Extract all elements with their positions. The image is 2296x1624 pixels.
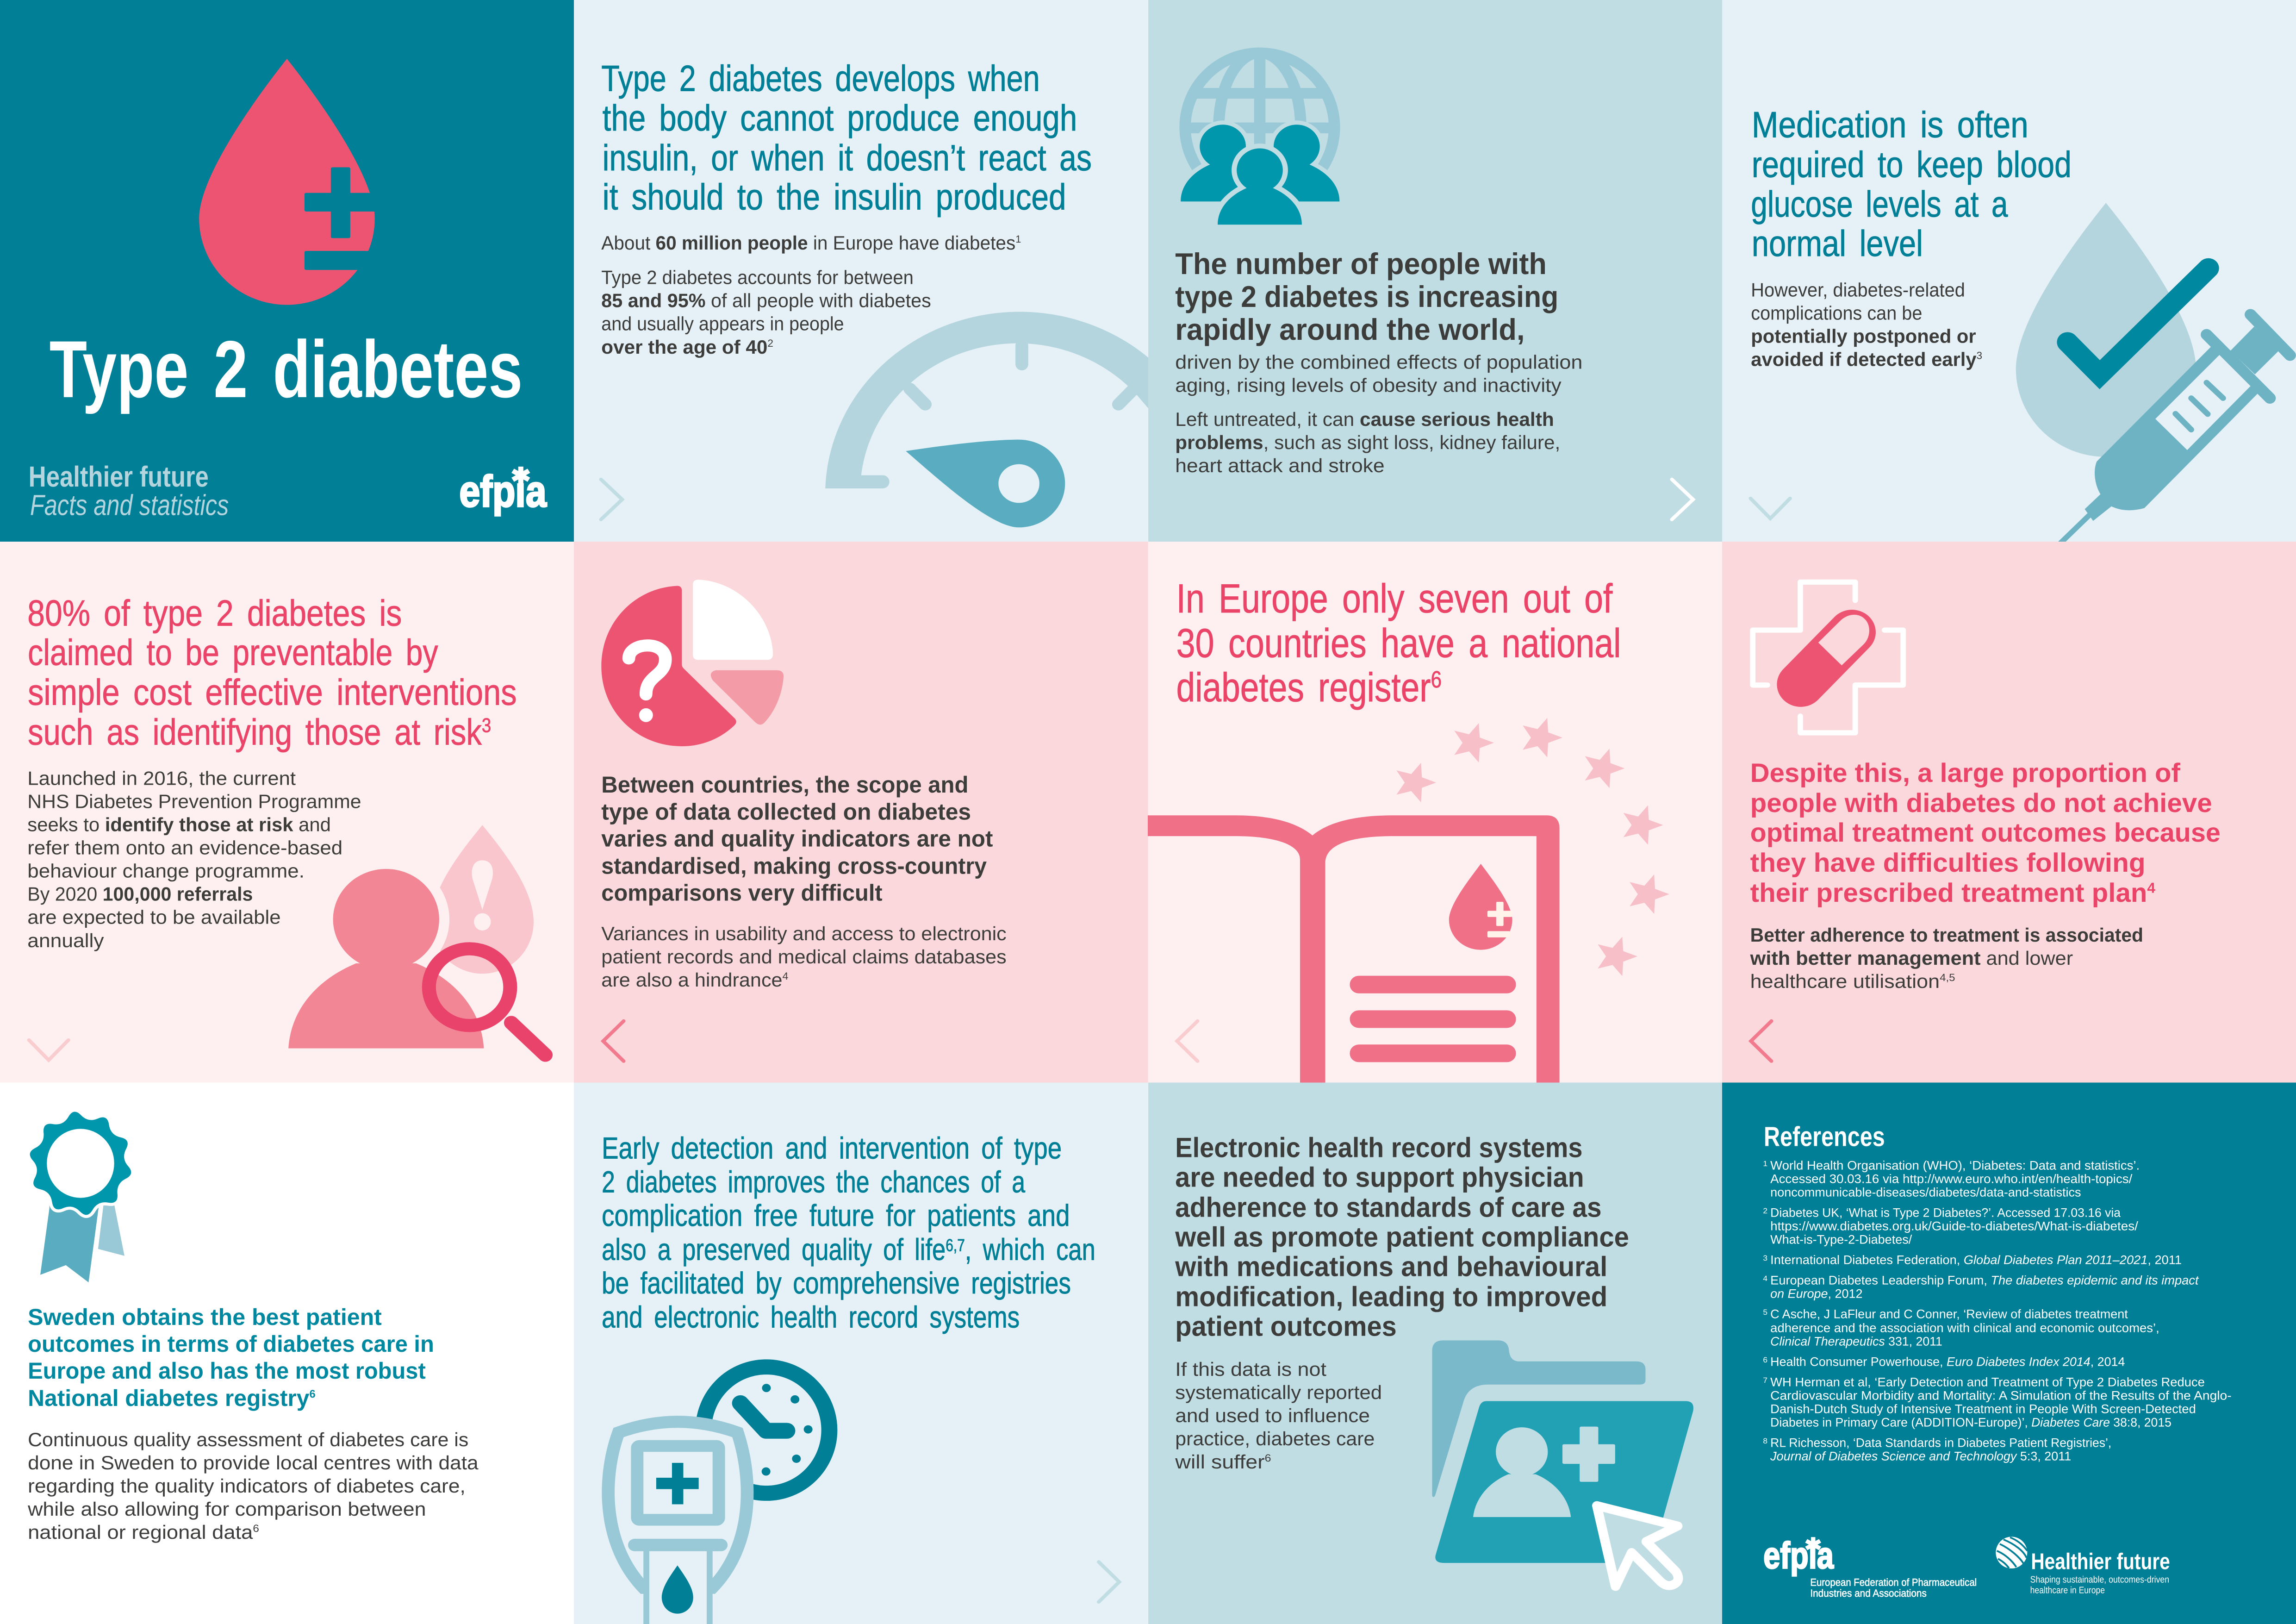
heading: be facilitated by comprehensive registries [602, 1266, 1071, 1300]
heading: complication free future for patients and [602, 1198, 1070, 1232]
heading [1750, 758, 2221, 908]
heading: National diabetes registry [28, 1385, 328, 1411]
panel: treatment adherence [1722, 542, 2296, 1084]
heading: 2 diabetes improves the chances of a [602, 1165, 1025, 1199]
heading: , which can [965, 1232, 1095, 1267]
reference list: What-is-Type-2-Diabetes/ [1770, 1232, 1912, 1247]
body text: driven by the combined effects of population [1175, 351, 1582, 373]
panel: references [1722, 1083, 2296, 1624]
icon: open book register [1148, 815, 1560, 1084]
reference list: World Health Organisation (WHO), ‘Diabetes: Data and statistics’. [1770, 1158, 2140, 1172]
heading: comparisons very difficult [601, 880, 883, 906]
reference list: 5 [1763, 1308, 1767, 1317]
heading: insulin, or when it doesn’t react as [603, 137, 1092, 178]
body text: problems, such as sight loss, kidney failure, [1175, 431, 1560, 453]
heading: Medication is often [1752, 104, 2028, 145]
panel: medication [1722, 0, 2296, 543]
reference list: 7 [1763, 1376, 1767, 1385]
body text [1175, 1358, 1382, 1473]
body text [1175, 351, 1582, 476]
body text: done in Sweden to provide local centres with data [28, 1452, 479, 1474]
heading: their prescribed treatment plan [1750, 878, 2165, 908]
panel: data variation [574, 542, 1148, 1084]
heading: In Europe only seven out of [1176, 576, 1612, 621]
panel: increasing worldwide [1148, 0, 1723, 542]
statistics text: 2 [767, 337, 773, 349]
arrow: right [601, 480, 622, 519]
heading: rapidly around the world, [1175, 313, 1525, 346]
icon: award rosette [30, 1112, 131, 1282]
reference list: 8 [1763, 1437, 1767, 1445]
panel: what is type 2 diabetes [574, 0, 1149, 542]
heading: Electronic health record systems [1175, 1132, 1582, 1163]
arrow: right [1672, 480, 1693, 519]
panel: early detection [574, 1083, 1148, 1624]
heading: it should to the insulin produced [603, 177, 1066, 218]
efpia logo: European Federation of Pharmaceutical [1810, 1577, 1977, 1588]
reference list: Accessed 30.03.16 via http://www.euro.who.int/en/health-topics/ [1770, 1172, 2132, 1186]
reference list: Danish-Dutch Study of Intensive Treatment in People With Screen-Detected [1770, 1402, 2196, 1416]
heading: Type 2 diabetes develops when [601, 58, 1040, 99]
heading: references: References [1764, 1121, 1885, 1152]
reference list: noncommunicable-diseases/diabetes/data-and-statistics [1770, 1185, 2081, 1199]
panel: title [0, 0, 574, 542]
body text: 4,5 [1940, 972, 1955, 983]
body text: national or regional data [28, 1521, 248, 1543]
icon: person, drop and magnifier [288, 825, 545, 1055]
heading: Europe and also has the most robust [28, 1358, 426, 1384]
heading: glucose levels at a [1751, 184, 2008, 225]
heading: also a preserved quality of life [602, 1232, 1057, 1267]
body text: practice, diabetes care [1175, 1428, 1375, 1449]
heading: The number of people with [1175, 247, 1547, 281]
heading [1175, 247, 1558, 346]
body text: Launched in 2016, the current [27, 768, 296, 789]
heading [1751, 104, 2072, 264]
body text: complications can be [1751, 302, 1922, 324]
body text [27, 1429, 479, 1543]
subtitle [30, 466, 229, 516]
heading: claimed to be preventable by [28, 632, 438, 673]
body text: while also allowing for comparison between [27, 1498, 426, 1520]
heading: Between countries, the scope and [601, 772, 968, 798]
heading: type 2 diabetes is increasing [1175, 280, 1558, 313]
reference list: 4 [1763, 1274, 1767, 1283]
reference list: Journal of Diabetes Science and Technology 5:3, 2011 [1770, 1449, 2071, 1463]
heading: Early detection and intervention of type [602, 1131, 1062, 1165]
heading: 30 countries have a national [1176, 620, 1621, 666]
heading [602, 1131, 1095, 1334]
icon: stars [1389, 712, 1674, 979]
statistics text: and usually appears in people [601, 313, 844, 335]
arrow: down [1750, 499, 1790, 518]
reference list: https://www.diabetes.org.uk/Guide-to-diabetes/What-is-diabetes/ [1770, 1219, 2138, 1233]
body text: refer them onto an evidence-based [27, 837, 342, 859]
body text: healthcare utilisation [1750, 970, 1937, 992]
body text [1750, 924, 2143, 992]
heading: well as promote patient compliance [1175, 1222, 1629, 1253]
heading: modification, leading to improved [1175, 1281, 1607, 1312]
icon: globe with people [1181, 52, 1339, 225]
heading: 4 [2147, 880, 2156, 896]
heading: 80% of type 2 diabetes is [27, 593, 402, 634]
subtitle: Facts and statistics [30, 489, 229, 521]
statistics text: 85 and 95% of all people with diabetes [601, 290, 931, 312]
body text: systematically reported [1175, 1381, 1382, 1403]
heading: patient outcomes [1175, 1311, 1397, 1342]
body text: Left untreated, it can cause serious health [1175, 408, 1554, 430]
body text: are also a hindrance [601, 969, 787, 991]
heading [1175, 1132, 1629, 1342]
heading: Despite this, a large proportion of [1750, 758, 2180, 788]
body text: Continuous quality assessment of diabetes care is [28, 1429, 468, 1450]
heading: 6 [1431, 667, 1442, 693]
reference list: 3 [1763, 1254, 1767, 1262]
icon: blood drop with plus and minus [199, 59, 378, 305]
icon: clock [703, 1367, 829, 1493]
statistics text: 1 [1015, 234, 1021, 245]
heading [601, 58, 1092, 218]
reference list: 6 [1763, 1355, 1767, 1364]
heading: standardised, making cross-country [601, 853, 987, 879]
body text: potentially postponed or [1751, 325, 1976, 347]
reference list: Cardiovascular Morbidity and Mortality: A Simulation of the Results of the Anglo- [1770, 1388, 2232, 1402]
heading: 6,7 [946, 1236, 965, 1255]
healthier future logo: Shaping sustainable, outcomes-driven [2030, 1574, 2169, 1585]
heading [601, 772, 993, 906]
reference list: 2 [1763, 1206, 1767, 1215]
body text: behaviour change programme. [27, 860, 305, 882]
healthier future logo: healthcare in Europe [2030, 1585, 2105, 1595]
body text: 6 [1265, 1453, 1271, 1464]
body text: and used to influence [1175, 1405, 1370, 1426]
statistics text [601, 232, 1021, 358]
heading: Sweden obtains the best patient [28, 1304, 382, 1330]
body text: 6 [253, 1523, 259, 1534]
heading: they have difficulties following [1750, 848, 2146, 878]
icon: pie chart with question mark [601, 580, 784, 746]
panel: national registers [1148, 542, 1723, 1084]
body text: avoided if detected early [1751, 349, 1977, 370]
heading: are needed to support physician [1175, 1162, 1584, 1193]
icon: drop, check and syringe [2016, 203, 2290, 543]
statistics text: over the age of 40 [601, 336, 767, 358]
body text: By 2020 100,000 referrals [27, 883, 253, 905]
body text: will suffer [1175, 1451, 1260, 1473]
reference list: International Diabetes Federation, Global Diabetes Plan 2011–2021, 2011 [1770, 1253, 2182, 1267]
subtitle: Healthier future [29, 460, 209, 493]
heading: and electronic health record systems [602, 1300, 1020, 1334]
reference list: Diabetes UK, ‘What is Type 2 Diabetes?’. Accessed 17.03.16 via [1770, 1206, 2121, 1219]
body text: If this data is not [1175, 1358, 1326, 1380]
heading [1176, 576, 1621, 710]
body text: with better management and lower [1750, 947, 2073, 969]
body text: seeks to identify those at risk and [27, 814, 331, 836]
reference list: C Asche, J LaFleur and C Conner, ‘Review of diabetes treatment [1770, 1307, 2128, 1321]
heading: adherence to standards of care as [1175, 1192, 1602, 1223]
reference list: WH Herman et al, ‘Early Detection and Treatment of Type 2 Diabetes Reduce [1770, 1375, 2205, 1389]
body text: annually [27, 930, 104, 951]
body text [27, 768, 361, 951]
heading: diabetes register [1176, 665, 1501, 710]
body text: heart attack and stroke [1175, 455, 1385, 476]
arrow: left [1177, 1021, 1198, 1061]
reference list: Clinical Therapeutics 331, 2011 [1770, 1334, 1942, 1348]
body text: Variances in usability and access to electronic [601, 923, 1007, 944]
body text: However, diabetes-related [1751, 279, 1965, 301]
heading: simple cost effective interventions [28, 672, 517, 713]
heading: outcomes in terms of diabetes care in [28, 1331, 434, 1357]
efpia logo: efpia [459, 467, 547, 516]
body text: 4 [783, 971, 788, 982]
heading: 3 [482, 714, 491, 737]
heading [27, 593, 517, 752]
heading: normal level [1752, 223, 1923, 264]
reference list: European Diabetes Leadership Forum, The diabetes epidemic and its impact [1770, 1273, 2199, 1287]
reference list: adherence and the association with clinical and economic outcomes’, [1770, 1321, 2159, 1335]
icon: pill in medical cross [1753, 582, 1903, 733]
reference list: Diabetes in Primary Care (ADDITION-Europe)’, Diabetes Care 38:8, 2015 [1770, 1415, 2172, 1430]
body text [601, 923, 1007, 991]
heading: optimal treatment outcomes because [1750, 818, 2221, 848]
heading: such as identifying those at risk [28, 712, 596, 752]
panel: sweden [0, 1083, 574, 1624]
icon: patient folder with cursor [1432, 1340, 1693, 1587]
heading: required to keep blood [1752, 144, 2072, 185]
reference list: RL Richesson, ‘Data Standards in Diabetes Patient Registries’, [1770, 1436, 2111, 1450]
reference list [1763, 1158, 2232, 1463]
icon: glucose meter [608, 1422, 747, 1624]
body text: 3 [1977, 350, 1982, 362]
reference list: 1 [1763, 1159, 1767, 1168]
body text: patient records and medical claims databases [601, 946, 1007, 968]
healthier future logo: Healthier future [2031, 1549, 2170, 1574]
body text: NHS Diabetes Prevention Programme [27, 791, 361, 812]
arrow: left [603, 1021, 624, 1061]
title: Type 2 diabetes [50, 324, 523, 414]
arrow: down [29, 1040, 68, 1060]
statistics text: About 60 million people in Europe have diabetes [601, 232, 1035, 254]
heading: 6 [309, 1387, 316, 1400]
reference list: Health Consumer Powerhouse, Euro Diabetes Index 2014, 2014 [1770, 1355, 2125, 1368]
arrow: left [1751, 1021, 1772, 1061]
reference list: on Europe, 2012 [1770, 1287, 1862, 1301]
heading: varies and quality indicators are not [601, 826, 993, 852]
efpia logo [1763, 1534, 1977, 1599]
panel: electronic health records [1148, 1083, 1723, 1624]
heading: with medications and behavioural [1175, 1251, 1607, 1282]
heading: people with diabetes do not achieve [1750, 788, 2212, 818]
statistics text: Type 2 diabetes accounts for between [601, 267, 914, 288]
body text: Better adherence to treatment is associated [1750, 924, 2143, 946]
icon: gauge [825, 312, 1149, 527]
body text [1751, 279, 1982, 370]
efpia logo: efpia [1763, 1534, 1834, 1576]
heading [28, 1304, 434, 1411]
heading: type of data collected on diabetes [601, 799, 971, 824]
body text: aging, rising levels of obesity and inactivity [1175, 375, 1562, 396]
heading: the body cannot produce enough [603, 98, 1077, 138]
healthier future logo [1996, 1537, 2170, 1595]
body text: are expected to be available [27, 906, 281, 928]
panel: prevention [0, 542, 574, 1084]
body text: regarding the quality indicators of diabetes care, [28, 1475, 466, 1497]
efpia logo: Industries and Associations [1810, 1588, 1927, 1599]
arrow: right [1099, 1562, 1119, 1602]
